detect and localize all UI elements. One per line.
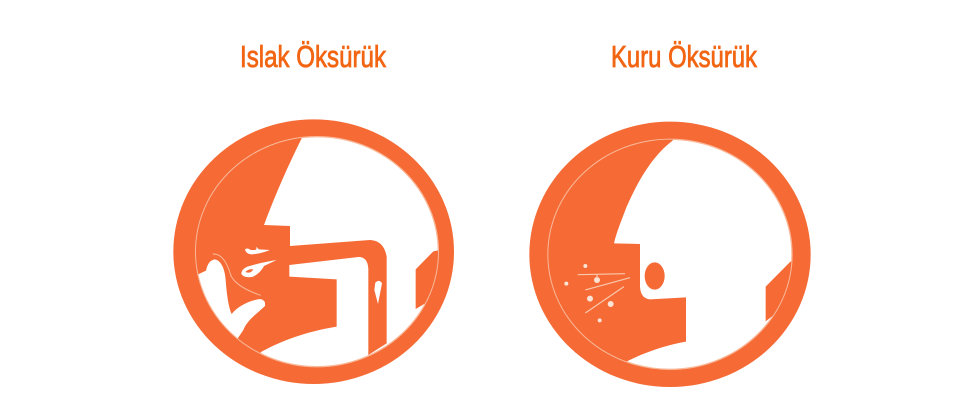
droplet on throat (374, 281, 382, 304)
icon: dry cough head (529, 122, 811, 387)
title: wet cough: Islak Öksürük (240, 39, 386, 74)
mouth (645, 262, 665, 290)
cough lines (578, 274, 630, 313)
icon: wet cough head (173, 119, 454, 384)
mist droplets (245, 247, 270, 254)
cough particles (564, 264, 614, 322)
title: dry cough: Kuru Öksürük (611, 39, 757, 74)
